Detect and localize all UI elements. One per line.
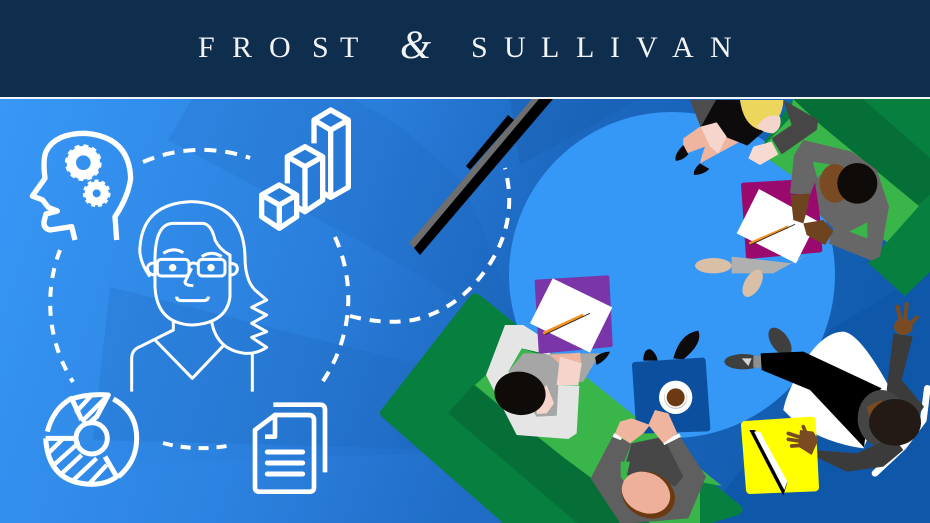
icon: 3D bar chart [262, 110, 348, 228]
person in suit [591, 410, 706, 523]
wall screen [409, 99, 553, 255]
legs and shoes [732, 255, 807, 273]
person in black, top [675, 100, 818, 175]
icon: head with gears [32, 133, 131, 240]
icon: pie chart [43, 393, 137, 488]
torso [858, 390, 906, 447]
paper [530, 278, 612, 353]
yellow notepad [745, 421, 815, 490]
background shapes [0, 99, 640, 523]
person and yellow notepad: lower right [724, 304, 927, 496]
trousers [761, 352, 882, 447]
pencil [749, 224, 795, 245]
person in gray [790, 140, 889, 261]
head [867, 400, 883, 425]
sofa: lower left [380, 294, 743, 523]
shoes [724, 354, 762, 369]
title: Frost & Sullivan: SULLIVAN [471, 31, 732, 64]
people: lower centre [486, 277, 707, 523]
title: Frost & Sullivan [198, 22, 732, 67]
hand [788, 427, 818, 455]
magenta notepad [743, 181, 820, 257]
person in white sweater [486, 325, 610, 439]
blue notepad [635, 361, 707, 431]
icon: woman with glasses [132, 202, 267, 392]
pencil [543, 313, 590, 335]
header band [0, 0, 930, 97]
paper [737, 189, 817, 263]
raised arm [887, 333, 924, 423]
title: Frost & Sullivan: & [400, 22, 431, 67]
title: Frost & Sullivan: FROST [198, 31, 358, 64]
icon: documents [255, 405, 325, 492]
book [749, 430, 787, 496]
sofa: top right [758, 99, 930, 296]
purple notepad [537, 277, 611, 352]
person and notepad: top right [675, 100, 889, 300]
round table [509, 112, 835, 438]
line icons [32, 110, 348, 492]
dashed connecting circle [50, 150, 509, 448]
coffee cup [659, 381, 692, 414]
hand and arm over notepad [550, 353, 582, 385]
lower arm [812, 437, 903, 472]
white chair [783, 332, 890, 448]
shoes [643, 331, 699, 361]
header rule [0, 97, 930, 99]
